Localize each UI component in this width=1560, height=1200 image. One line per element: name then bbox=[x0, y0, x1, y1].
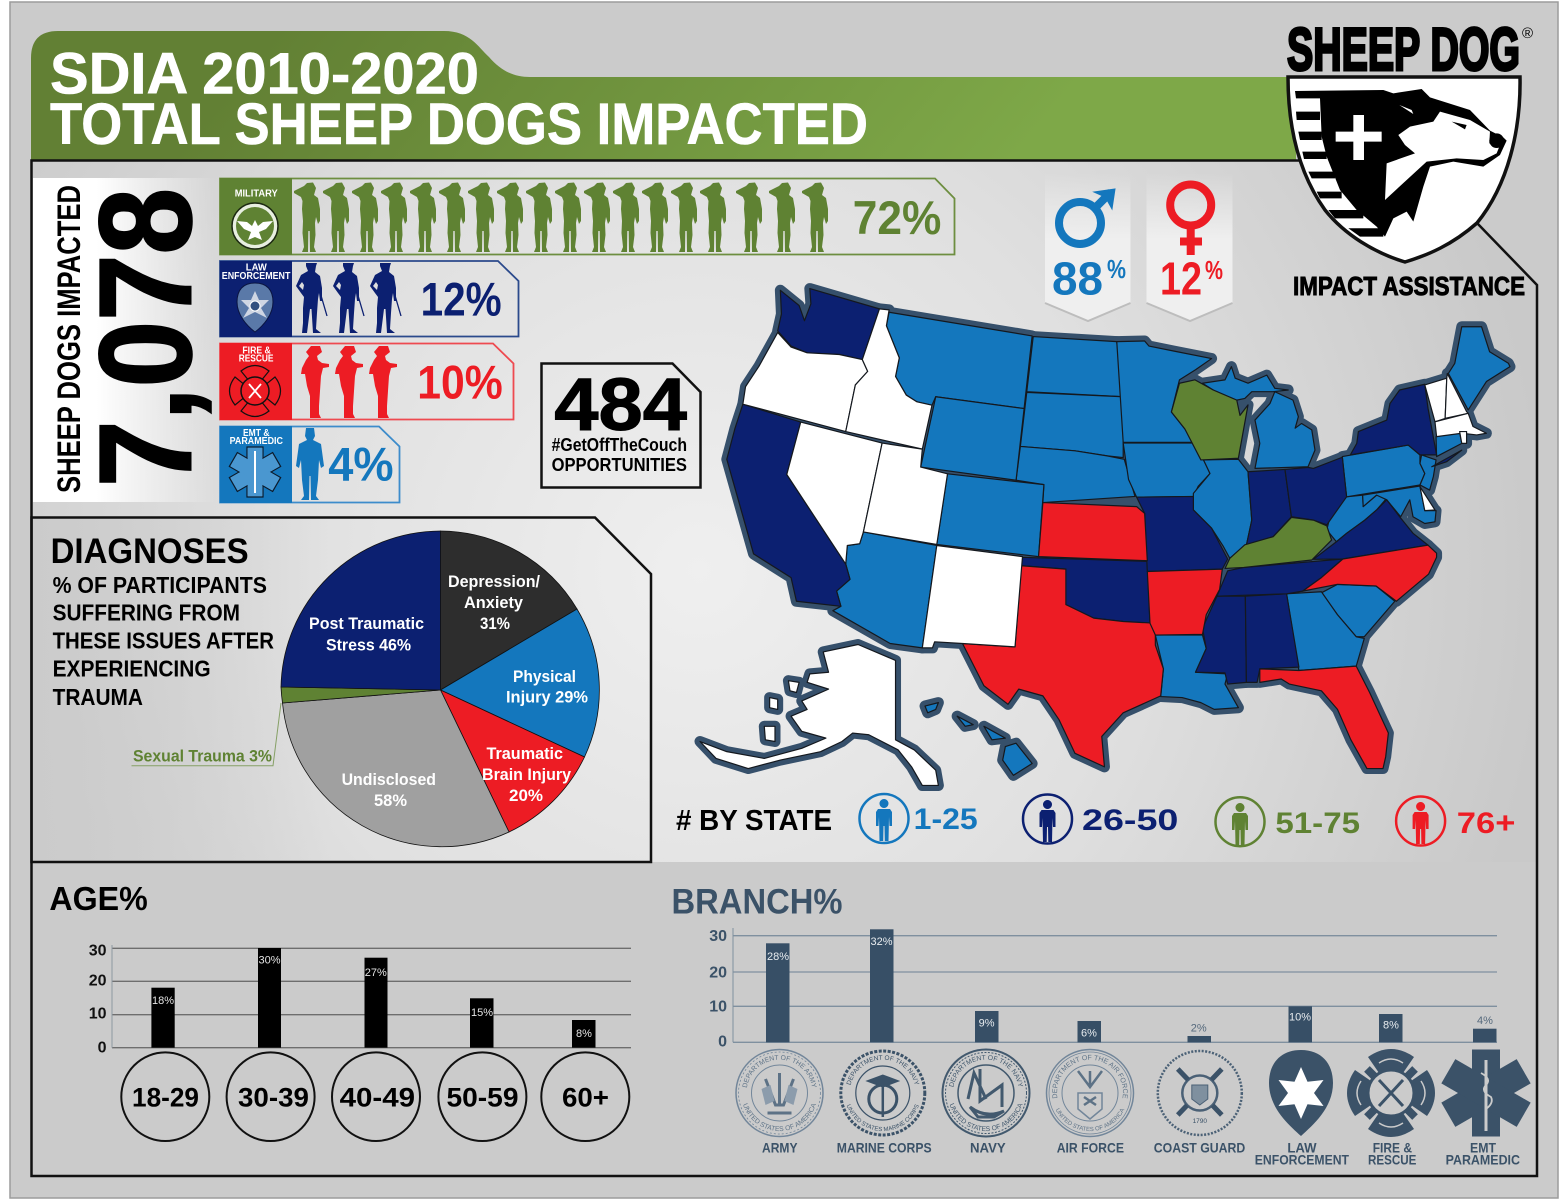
bar chart: age: 30 bbox=[89, 942, 107, 960]
branch labels: COAST GUARD bbox=[1154, 1140, 1245, 1156]
legend item: 76+: 76+ bbox=[1457, 807, 1515, 840]
heading: age: AGE% bbox=[49, 880, 148, 917]
bar chart: age: 10 bbox=[89, 1006, 107, 1022]
icon: law badge bbox=[1269, 1050, 1333, 1136]
pie chart bbox=[281, 531, 599, 847]
bar chart: branch: 20 bbox=[709, 964, 727, 981]
bar chart: age: 0 bbox=[98, 1040, 107, 1056]
category: military 72%: MILITARY bbox=[235, 189, 278, 200]
icon: fire cross bbox=[230, 366, 280, 416]
text: diagnoses description: SUFFERING FROM bbox=[53, 600, 240, 626]
total impacted panel bbox=[33, 178, 218, 502]
diagnoses panel shading bbox=[32, 518, 332, 862]
legend item: 51-75: 51-75 bbox=[1275, 807, 1360, 840]
heading: branch: BRANCH% bbox=[672, 882, 842, 921]
bar chart: age: 15% bbox=[471, 1007, 493, 1019]
seal: air force bbox=[1046, 1048, 1134, 1138]
pie labels: 20% bbox=[509, 786, 543, 805]
category: EMT and paramedic 4%: PARAMEDIC bbox=[230, 436, 283, 447]
header banner bbox=[31, 31, 1296, 160]
legend item: 1-25 bbox=[860, 794, 978, 843]
soldiers saluting bbox=[294, 182, 828, 252]
female share: 12%: 12 bbox=[1160, 252, 1202, 304]
branch labels: FIRE & bbox=[1373, 1140, 1412, 1156]
logo: Sheep Dog shield: ® bbox=[1522, 25, 1533, 42]
pie labels: Injury 29% bbox=[506, 688, 588, 707]
states 76+: red bbox=[962, 503, 1437, 769]
category: EMT and paramedic 4%: EMT & bbox=[243, 428, 270, 439]
sheep dogs impacted label: SHEEP DOGS IMPACTED bbox=[51, 185, 87, 493]
seal: marine corps: DEPARTMENT OF THE NAVY bbox=[846, 1055, 920, 1085]
panel: diagnoses bbox=[32, 518, 651, 862]
pie labels bbox=[309, 572, 588, 810]
pie labels: 58% bbox=[374, 791, 407, 810]
panel: age: 30-39 bbox=[238, 1083, 309, 1113]
category: law enforcement 12%: ENFORCEMENT bbox=[222, 271, 290, 282]
states with no participants: white bbox=[700, 309, 1486, 785]
female share: 12%: % bbox=[1205, 255, 1223, 285]
panel: branch bbox=[672, 882, 1531, 1168]
branch labels: NAVY bbox=[970, 1140, 1006, 1156]
pie labels: Anxiety bbox=[464, 593, 524, 612]
logo: Sheep Dog shield bbox=[1287, 16, 1533, 301]
text: diagnoses description: THESE ISSUES AFTER bbox=[53, 628, 274, 654]
bar chart: branch: 9% bbox=[979, 1018, 995, 1030]
callout: sexual trauma bbox=[132, 703, 281, 766]
branch labels: EMT bbox=[1470, 1140, 1496, 1156]
panel: age: 60+ bbox=[562, 1083, 609, 1113]
states 26-50: navy bbox=[727, 289, 1462, 684]
states 51-75: green bbox=[1171, 380, 1332, 568]
seal: coast guard: 1790 bbox=[1193, 1118, 1207, 1125]
panel: age: 40-49 bbox=[340, 1083, 415, 1113]
bar chart: branch: 8% bbox=[1383, 1019, 1399, 1031]
bar chart: branch: 0 bbox=[718, 1034, 727, 1051]
pie labels: Undisclosed bbox=[342, 770, 436, 789]
legend item: 51-75 bbox=[1216, 797, 1360, 846]
legend: number by state: # BY STATE bbox=[676, 805, 832, 837]
firefighters bbox=[301, 346, 397, 418]
bar chart: branch: 32% bbox=[870, 936, 893, 948]
pie labels: Traumatic bbox=[486, 744, 563, 763]
callout: 484 opportunities: 484 bbox=[554, 363, 687, 446]
main panel background bbox=[32, 161, 1537, 862]
pie labels: Physical bbox=[513, 667, 576, 686]
category: fire and rescue 10%: RESCUE bbox=[239, 354, 274, 365]
map: participants by state bbox=[700, 289, 1510, 785]
bar chart: branch: 2% bbox=[1191, 1023, 1207, 1035]
branch labels: PARAMEDIC bbox=[1446, 1152, 1520, 1168]
category: fire and rescue 10%: 10% bbox=[417, 355, 503, 408]
bar chart: branch: 28% bbox=[767, 951, 789, 963]
category: EMT and paramedic 4% bbox=[220, 426, 400, 503]
callout: 484 opportunities: #GetOffTheCouch bbox=[552, 435, 687, 455]
text: diagnoses description: TRAUMA bbox=[53, 684, 143, 710]
seal: marine corps bbox=[839, 1050, 926, 1136]
branch labels: RESCUE bbox=[1368, 1152, 1416, 1168]
panel: age: 18-29 bbox=[132, 1083, 199, 1113]
icon: star of life bbox=[229, 447, 281, 497]
male share: 88% bbox=[1045, 173, 1130, 321]
branch labels: ENFORCEMENT bbox=[1255, 1152, 1349, 1168]
bar chart: branch: 10 bbox=[709, 999, 727, 1016]
icon: fire cross bbox=[1347, 1049, 1435, 1137]
seal: air force: UNITED STATES OF AMERICA bbox=[1056, 1108, 1124, 1132]
branch labels: AIR FORCE bbox=[1057, 1140, 1124, 1156]
icon: sheep dog head bbox=[1295, 89, 1507, 237]
callout: 484 opportunities bbox=[542, 363, 700, 488]
bar chart: branch bbox=[709, 928, 1497, 1051]
bar chart: age bbox=[89, 942, 631, 1056]
bar chart: age: 27% bbox=[365, 967, 387, 979]
icon: star of life bbox=[1441, 1050, 1531, 1136]
title bbox=[50, 42, 868, 157]
panel: age: 50-59 bbox=[446, 1083, 518, 1113]
legend: number by state bbox=[676, 794, 1515, 846]
category: EMT and paramedic 4%: 4% bbox=[328, 438, 394, 491]
seal: coast guard bbox=[1158, 1051, 1242, 1135]
branch labels: ARMY bbox=[762, 1140, 798, 1156]
icon: military seal bbox=[232, 203, 278, 249]
pie labels: 31% bbox=[480, 614, 510, 633]
heading: diagnoses: DIAGNOSES bbox=[51, 532, 249, 571]
legend item: 26-50 bbox=[1023, 794, 1178, 844]
category: military 72% bbox=[220, 178, 954, 255]
seal: army bbox=[735, 1048, 824, 1138]
branch labels: MARINE CORPS bbox=[837, 1140, 932, 1156]
logo tagline: IMPACT ASSISTANCE bbox=[1293, 271, 1525, 301]
seal: marine corps: UNITED STATES MARINE CORPS bbox=[847, 1104, 918, 1132]
title: TOTAL SHEEP DOGS IMPACTED bbox=[50, 92, 868, 157]
seal: navy: UNITED STATES OF AMERICA bbox=[950, 1103, 1022, 1132]
legend item: 26-50: 26-50 bbox=[1082, 804, 1178, 837]
bar chart: branch: 10% bbox=[1289, 1012, 1311, 1024]
bar chart: age: 8% bbox=[576, 1028, 592, 1040]
male share: 88%: % bbox=[1107, 254, 1126, 284]
branch labels: LAW bbox=[1287, 1140, 1317, 1156]
states 1-25: blue bbox=[833, 312, 1510, 775]
seal: army: UNITED STATES OF AMERICA bbox=[744, 1103, 816, 1132]
icon: police badge bbox=[237, 283, 273, 332]
title: SDIA 2010-2020 bbox=[50, 42, 479, 106]
text: diagnoses description: EXPERIENCING bbox=[53, 656, 211, 682]
pie labels: Post Traumatic bbox=[309, 614, 424, 633]
legend item: 1-25: 1-25 bbox=[914, 803, 978, 836]
category: law enforcement 12%: LAW bbox=[246, 263, 267, 274]
icon: female symbol bbox=[1170, 184, 1211, 255]
total number 7,078: 7,078 bbox=[72, 188, 218, 487]
seal: army: DEPARTMENT OF THE ARMY bbox=[742, 1055, 817, 1088]
category: law enforcement 12%: 12% bbox=[421, 272, 502, 325]
panel: age bbox=[49, 880, 631, 1141]
callout: 484 opportunities: OPPORTUNITIES bbox=[552, 455, 687, 475]
seal: navy: DEPARTMENT OF THE NAVY bbox=[949, 1055, 1024, 1087]
icon: male symbol bbox=[1059, 189, 1115, 244]
bar chart: age: 20 bbox=[89, 972, 107, 990]
category: fire and rescue 10%: FIRE & bbox=[242, 346, 271, 357]
age group labels bbox=[121, 1052, 629, 1141]
bar chart: branch: 4% bbox=[1477, 1015, 1493, 1027]
bar chart: branch: 6% bbox=[1081, 1028, 1097, 1040]
text: diagnoses description: % OF PARTICIPANTS bbox=[53, 572, 267, 598]
bar chart: age: 18% bbox=[152, 995, 174, 1007]
callout: sexual trauma: Sexual Trauma 3% bbox=[133, 747, 272, 766]
text: diagnoses description bbox=[53, 572, 274, 710]
bar chart: branch: 30 bbox=[709, 928, 727, 945]
pie labels: Brain Injury bbox=[482, 765, 572, 784]
seal: air force: DEPARTMENT OF THE AIR FORCE bbox=[1052, 1054, 1128, 1098]
male share: 88%: 88 bbox=[1052, 252, 1103, 304]
legend item: 76+ bbox=[1396, 796, 1515, 846]
police officers bbox=[296, 263, 401, 333]
pie labels: Stress 46% bbox=[326, 636, 411, 655]
bar chart: age: 30% bbox=[258, 954, 281, 966]
branch labels bbox=[762, 1140, 1520, 1168]
category: fire and rescue 10% bbox=[220, 343, 514, 420]
seal: navy bbox=[942, 1048, 1030, 1138]
category: military 72%: 72% bbox=[853, 191, 941, 244]
female share: 12% bbox=[1146, 173, 1232, 321]
pie labels: Depression/ bbox=[448, 572, 540, 591]
category: law enforcement 12% bbox=[220, 261, 518, 337]
paramedic bbox=[296, 428, 324, 500]
